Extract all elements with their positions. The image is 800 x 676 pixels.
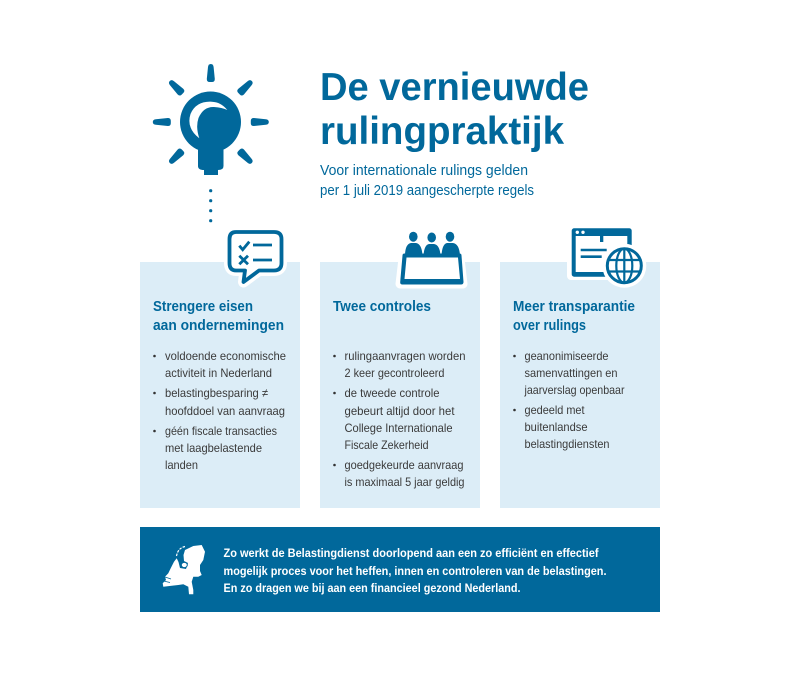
list: strengere eisen bbox=[153, 349, 286, 472]
subtitle bbox=[320, 163, 534, 199]
banner bbox=[140, 527, 660, 612]
list: twee controles: rulingaanvragen worden bbox=[344, 349, 466, 363]
list: strengere eisen: voldoende economische bbox=[165, 349, 286, 363]
list: meer transparantie: geanonimiseerde bbox=[524, 349, 609, 363]
subtitle: Voor internationale rulings gelden bbox=[320, 163, 528, 179]
panel: meer transparantie bbox=[500, 262, 660, 508]
banner text: mogelijk proces voor het heffen, innen en controleren van de belastingen. bbox=[224, 564, 606, 578]
list: twee controles: College Internationale bbox=[344, 421, 453, 435]
heading: strengere eisen: aan ondernemingen bbox=[153, 318, 284, 334]
list: meer transparantie bbox=[513, 349, 624, 451]
heading: strengere eisen: Strengere eisen bbox=[153, 299, 253, 315]
list: twee controles: goedgekeurde aanvraag bbox=[344, 458, 464, 472]
heading: twee controles: Twee controles bbox=[333, 299, 431, 315]
icon: speech bubble checklist bbox=[230, 232, 282, 282]
list: twee controles: gebeurt altijd door het bbox=[344, 404, 455, 418]
list: strengere eisen: belastingbesparing ≠ bbox=[165, 386, 268, 400]
heading: meer transparantie: Meer transparantie bbox=[513, 299, 635, 315]
banner text: En zo dragen we bij aan een financieel gezond Nederland. bbox=[224, 581, 520, 595]
heading: strengere eisen bbox=[153, 299, 284, 334]
title: De vernieuwde bbox=[320, 66, 589, 109]
list: strengere eisen: géén fiscale transacties bbox=[165, 424, 277, 438]
list: twee controles: 2 keer gecontroleerd bbox=[344, 366, 444, 380]
list: meer transparantie: samenvattingen en bbox=[524, 366, 618, 380]
list: strengere eisen: landen bbox=[165, 458, 198, 472]
list: meer transparantie: gedeeld met bbox=[524, 403, 585, 417]
subtitle: per 1 juli 2019 aangescherpte regels bbox=[320, 183, 534, 199]
list: strengere eisen: met laagbelastende bbox=[165, 441, 262, 455]
list: strengere eisen: hoofddoel van aanvraag bbox=[165, 404, 285, 418]
icon: browser window with globe bbox=[567, 227, 646, 288]
heading: meer transparantie bbox=[513, 299, 635, 334]
list: twee controles: is maximaal 5 jaar geldig bbox=[344, 475, 464, 489]
icon: three people at table bbox=[400, 232, 464, 284]
title bbox=[320, 66, 589, 153]
list: meer transparantie: jaarverslag openbaar bbox=[524, 383, 624, 397]
list: strengere eisen: activiteit in Nederland bbox=[165, 366, 272, 380]
list: meer transparantie: belastingdiensten bbox=[524, 437, 610, 451]
heading: meer transparantie: over rulings bbox=[513, 318, 586, 334]
list: twee controles bbox=[333, 349, 466, 489]
list: meer transparantie: buitenlandse bbox=[524, 420, 588, 434]
list: twee controles: Fiscale Zekerheid bbox=[344, 438, 428, 452]
panel: strengere eisen bbox=[140, 262, 300, 508]
banner text bbox=[224, 546, 606, 595]
icon: light bulb bbox=[153, 64, 269, 175]
title: rulingpraktijk bbox=[320, 110, 564, 153]
list: twee controles: de tweede controle bbox=[344, 386, 440, 400]
banner text: Zo werkt de Belastingdienst doorlopend aan een zo efficiënt en effectief bbox=[224, 546, 599, 560]
dotted connector bbox=[209, 189, 212, 222]
panel: twee controles bbox=[320, 262, 480, 508]
icon: map of the Netherlands bbox=[163, 545, 205, 594]
